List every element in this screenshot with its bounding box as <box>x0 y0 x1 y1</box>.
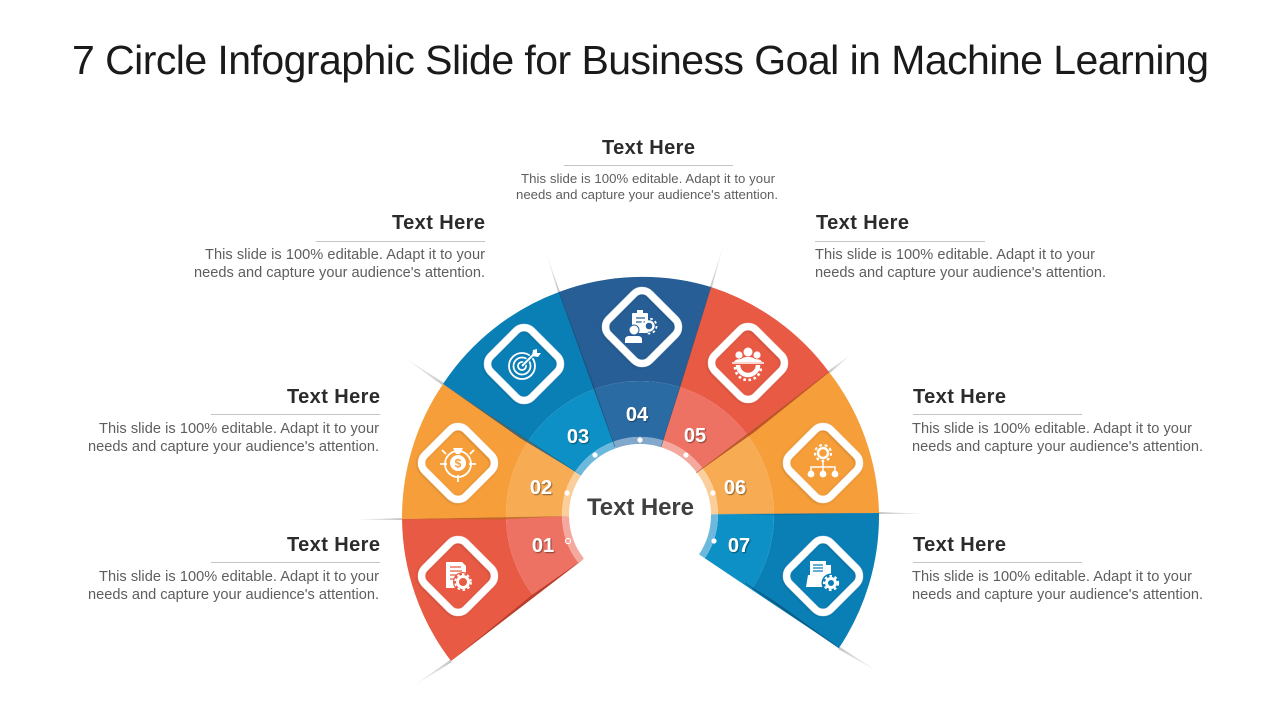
icon: document with gear in diamond <box>417 535 499 617</box>
text block: middle right: This slide is 100% editable. Adapt it to your <box>912 421 1192 437</box>
title: 7 Circle Infographic Slide for Business Goal in Machine Learning <box>72 37 1209 83</box>
text block: lower left: needs and capture your audience's attention. <box>88 587 379 603</box>
segment 06 orange <box>696 372 879 514</box>
text block: top: This slide is 100% editable. Adapt it to your <box>521 171 776 186</box>
step numbers: 04 <box>626 404 649 426</box>
icon: target with arrow in diamond <box>483 323 565 405</box>
text block: upper left <box>194 212 485 281</box>
text block: lower left: This slide is 100% editable. Adapt it to your <box>99 569 379 585</box>
step numbers <box>530 404 750 557</box>
text block: lower right <box>912 534 1203 603</box>
step numbers: 05 <box>684 425 706 447</box>
segment 04 navy <box>559 277 711 448</box>
icon: gear with network in diamond <box>782 422 864 504</box>
text block: lower left <box>88 534 380 603</box>
icon: team and gear in diamond <box>707 322 789 404</box>
text block: upper right: Text Here <box>816 212 909 234</box>
text block: upper right <box>815 212 1106 281</box>
text block: upper left: needs and capture your audience's attention. <box>194 265 485 281</box>
icon: money target in diamond: $ <box>455 456 462 470</box>
icon: folder with gear in diamond <box>782 535 864 617</box>
text block: middle right: needs and capture your audience's attention. <box>912 439 1203 455</box>
text block: lower right: needs and capture your audience's attention. <box>912 587 1203 603</box>
text block: middle left: Text Here <box>287 386 380 408</box>
text block: top: needs and capture your audience's attention. <box>516 187 778 202</box>
text block: upper right: This slide is 100% editable. Adapt it to your <box>815 247 1095 263</box>
step numbers: 06 <box>724 477 746 499</box>
segment 05 red <box>661 287 829 472</box>
text block: middle right: Text Here <box>913 386 1006 408</box>
text block: middle left: needs and capture your audience's attention. <box>88 439 379 455</box>
step numbers: 02 <box>530 477 552 499</box>
icon: money target in diamond <box>417 422 499 504</box>
text block: lower right: Text Here <box>913 534 1006 556</box>
ring dots <box>564 437 717 544</box>
text block: upper left: This slide is 100% editable. Adapt it to your <box>205 247 485 263</box>
text block: middle right <box>912 386 1203 455</box>
text block: upper right: needs and capture your audience's attention. <box>815 265 1106 281</box>
text block: top: Text Here <box>602 137 695 159</box>
segment 01 red <box>402 516 585 661</box>
text block: top <box>516 137 778 202</box>
segment 02 orange <box>402 384 581 520</box>
step numbers: 03 <box>567 426 589 448</box>
text block: middle left <box>88 386 380 455</box>
spike lines at segment corners <box>350 243 930 687</box>
text block: middle left: This slide is 100% editable. Adapt it to your <box>99 421 379 437</box>
icon: clipboard person and gear in diamond <box>601 286 683 368</box>
text block: upper left: Text Here <box>392 212 485 234</box>
segment 07 blue <box>699 513 879 648</box>
text block: lower left: Text Here <box>287 534 380 556</box>
step numbers: 01 <box>532 535 554 557</box>
step numbers: 07 <box>728 535 750 557</box>
center label: Text Here <box>587 494 694 521</box>
segment 03 blue <box>443 292 616 476</box>
text block: lower right: This slide is 100% editable. Adapt it to your <box>912 569 1192 585</box>
